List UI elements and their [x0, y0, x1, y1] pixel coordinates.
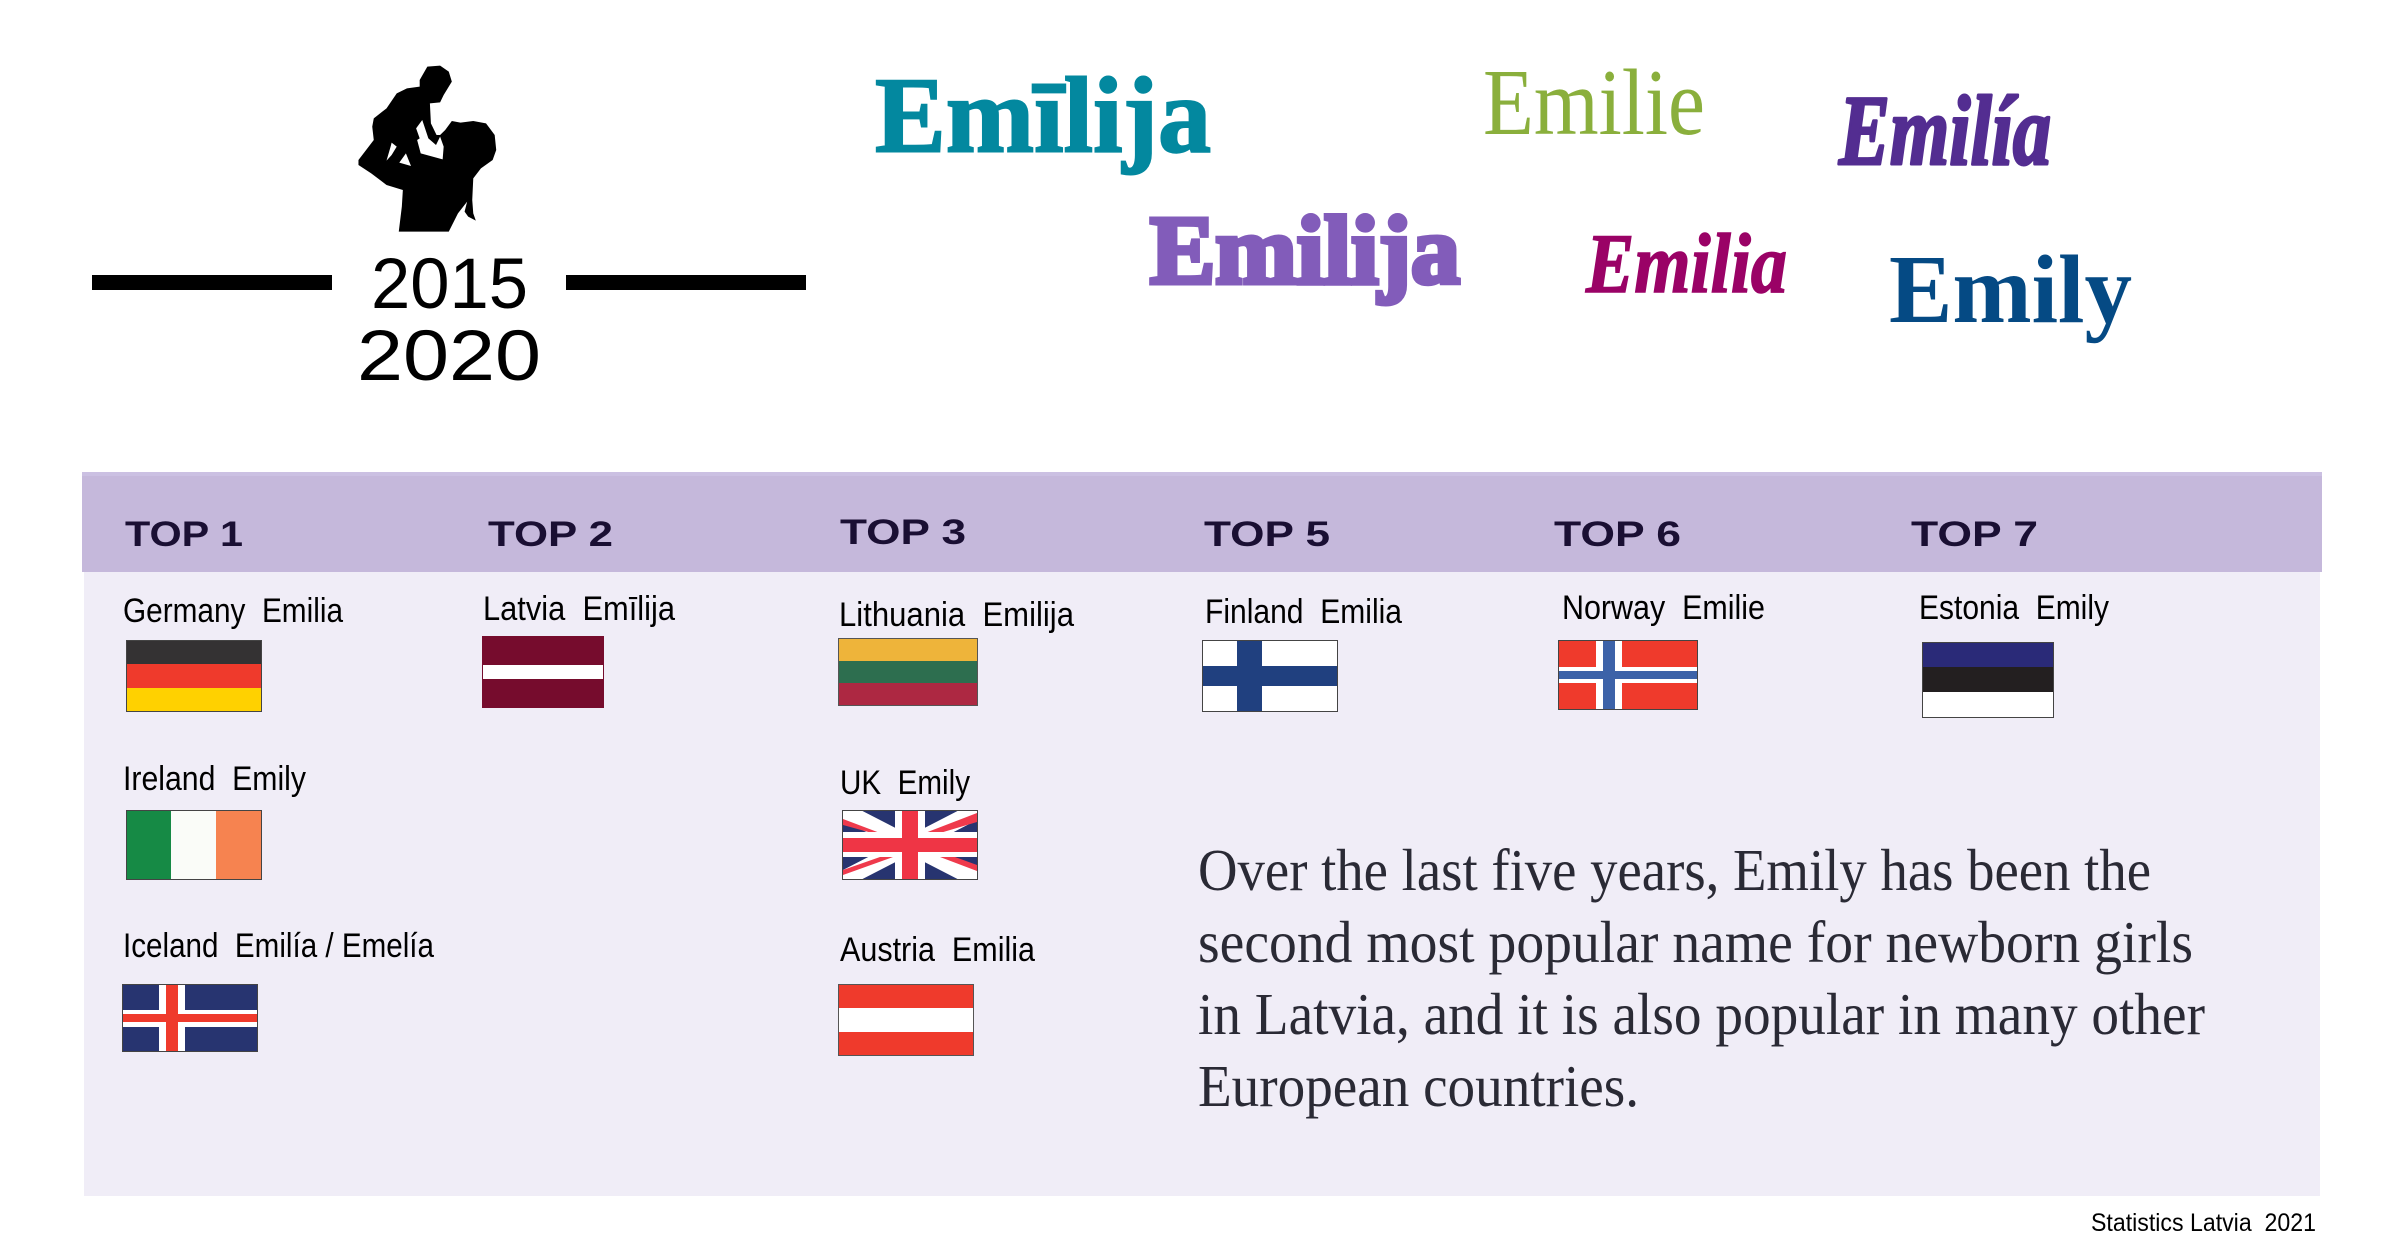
- year range with divider bars: 2020: [357, 317, 541, 396]
- header band: TOP 5: [1204, 515, 1330, 554]
- panel: country ranking: [82, 472, 2322, 1196]
- Ireland entry: Ireland Emily: [123, 760, 306, 798]
- Ireland entry: [123, 760, 306, 880]
- year range with divider bars: [92, 245, 806, 396]
- Finland entry: Finland Emilia: [1205, 593, 1402, 631]
- header band: TOP 6: [1554, 515, 1681, 554]
- paragraph: European countries.: [1198, 1053, 1639, 1119]
- header band: [82, 472, 2322, 572]
- name variants word cloud: Emilie: [1483, 51, 1705, 155]
- Iceland entry: [122, 927, 434, 1052]
- Estonia entry: [1919, 589, 2109, 718]
- Austria entry: [838, 931, 1035, 1056]
- paragraph: in Latvia, and it is also popular in many other: [1198, 981, 2205, 1047]
- header band: TOP 3: [840, 513, 966, 552]
- year range with divider bars: 2015: [371, 245, 528, 324]
- source credit: Statistics Latvia 2021: [2091, 1209, 2316, 1237]
- UK entry: [840, 764, 978, 880]
- Lithuania entry: Lithuania Emilija: [839, 596, 1074, 634]
- Germany entry: [123, 592, 343, 712]
- header band: TOP 2: [488, 515, 613, 554]
- Norway entry: [1558, 589, 1765, 710]
- Estonia entry: Estonia Emily: [1919, 589, 2109, 627]
- paragraph: second most popular name for newborn girls: [1198, 909, 2193, 975]
- icon: mother lifting baby silhouette: [358, 66, 496, 232]
- Latvia entry: [482, 590, 675, 708]
- header band: TOP 1: [125, 515, 243, 554]
- name variants word cloud: Emilía: [1838, 75, 2051, 186]
- Norway entry: Norway Emilie: [1562, 589, 1765, 627]
- name variants word cloud: Emilija: [1150, 197, 1460, 305]
- Iceland entry: Iceland Emilía / Emelía: [123, 927, 434, 965]
- Latvia entry: Latvia Emīlija: [483, 590, 675, 628]
- header band: TOP 7: [1911, 515, 2038, 554]
- Lithuania entry: [838, 596, 1074, 706]
- paragraph: Over the last five years, Emily has been the: [1198, 837, 2151, 903]
- UK entry: UK Emily: [840, 764, 970, 802]
- name variants word cloud: Emilia: [1585, 217, 1787, 311]
- name variants word cloud: [875, 51, 2132, 344]
- name variants word cloud: Emily: [1889, 236, 2132, 344]
- name variants word cloud: Emīlija: [875, 56, 1211, 176]
- paragraph: [1198, 837, 2205, 1119]
- Austria entry: Austria Emilia: [840, 931, 1035, 969]
- Germany entry: Germany Emilia: [123, 592, 343, 630]
- Finland entry: [1202, 593, 1402, 712]
